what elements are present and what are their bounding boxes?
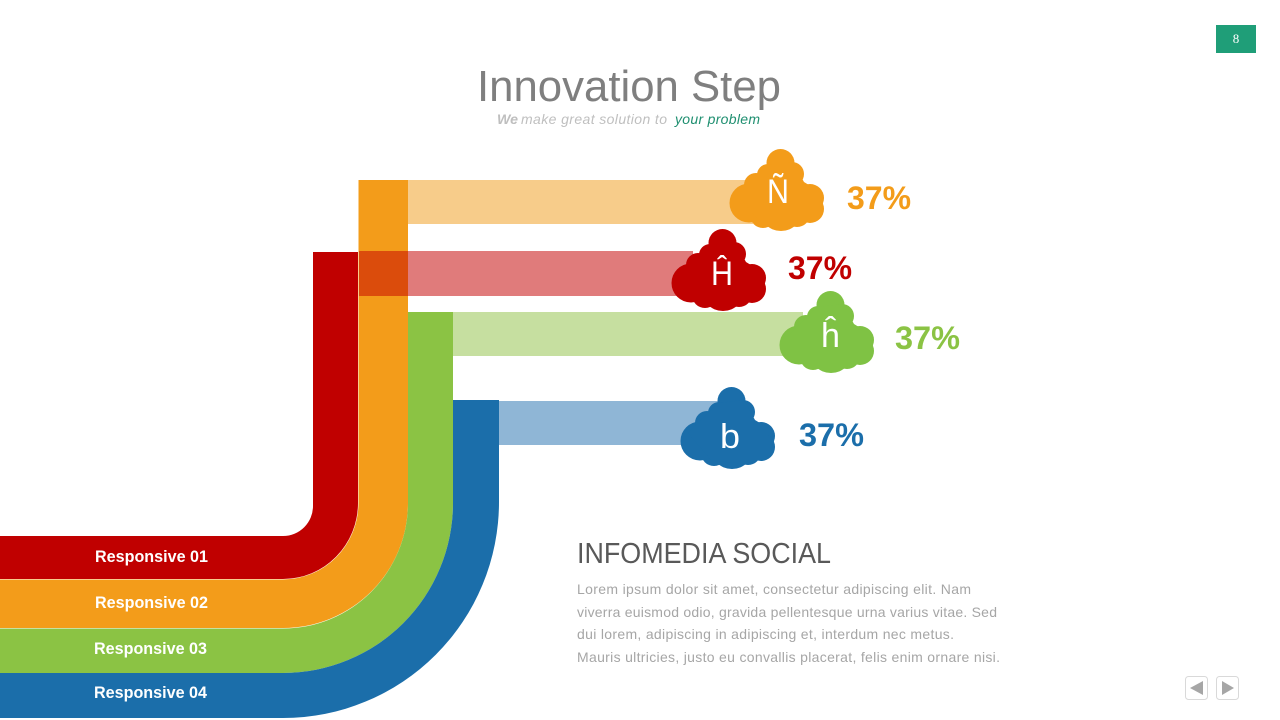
subtitle	[497, 111, 760, 127]
icon: orange cloud: Ñ	[767, 173, 789, 211]
text block body: Lorem ipsum dolor sit amet, consectetur adipiscing elit. Nam	[577, 581, 971, 597]
text block heading: INFOMEDIA SOCIAL	[577, 538, 831, 570]
subtitle: your problem	[674, 111, 760, 127]
title: Innovation Step	[477, 62, 781, 111]
text block body: Mauris ultricies, justo eu convallis placerat, felis enim ornare nisi.	[577, 649, 1000, 665]
page number badge	[1216, 25, 1256, 53]
percentage: orange: 37%	[847, 180, 911, 216]
percentage: green: 37%	[895, 320, 960, 356]
band: orange	[0, 180, 408, 628]
icon: orange cloud	[730, 149, 824, 231]
light bar: red	[408, 251, 693, 296]
band: green	[0, 312, 453, 673]
icon: red cloud	[672, 229, 766, 311]
light bar: blue	[499, 401, 724, 445]
icon: green cloud	[780, 291, 874, 373]
band labels: Responsive 01	[95, 547, 208, 566]
icon: red cloud: Ĥ	[711, 255, 733, 293]
icon: green cloud: ĥ	[821, 316, 840, 355]
percentage: red: 37%	[788, 250, 852, 286]
light bar: green	[453, 312, 803, 356]
subtitle: We	[497, 111, 518, 127]
text block body: viverra euismod odio, gravida pellentesque urna varius vitae. Sed	[577, 604, 997, 620]
band labels: Responsive 04	[94, 683, 208, 702]
icon: next button	[1216, 676, 1238, 700]
band: red	[0, 252, 358, 579]
band crossing overlap	[359, 251, 408, 296]
icon: previous button	[1186, 676, 1208, 700]
icon: blue cloud: b	[720, 418, 740, 456]
text block body	[577, 581, 1000, 665]
band: blue	[0, 400, 499, 718]
page number badge: 8	[1233, 31, 1239, 46]
band labels	[94, 547, 208, 702]
band labels: Responsive 02	[95, 593, 208, 612]
subtitle: make great solution to	[521, 111, 667, 127]
band labels: Responsive 03	[94, 639, 207, 658]
icon: blue cloud	[680, 387, 775, 469]
percentage: blue: 37%	[799, 417, 864, 453]
text block body: dui lorem, adipiscing in adipiscing et, interdum nec metus.	[577, 626, 954, 642]
light bar: orange	[408, 180, 753, 224]
